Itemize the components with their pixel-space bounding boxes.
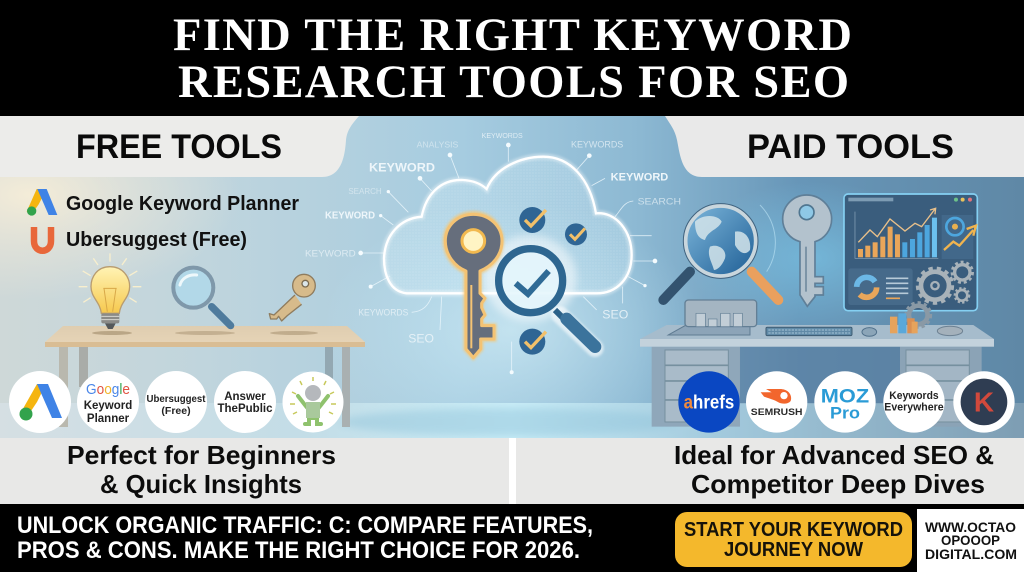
keyword labels: KEYWORDS: [571, 140, 623, 150]
logo: figure: [282, 372, 344, 432]
keyword labels: SEO: [602, 307, 628, 321]
title banner: [0, 0, 1024, 116]
keyword labels: [305, 131, 681, 345]
keyword labels: KEYWORD: [305, 249, 356, 259]
logo: google keyword planner: Planner: [87, 413, 130, 425]
icon: light bulb: [79, 253, 141, 329]
logo: google keyword planner: Keyword: [84, 400, 132, 412]
desk: paid tools: [640, 325, 994, 427]
keyword labels: SEARCH: [348, 186, 382, 196]
logo: moz pro: [814, 371, 876, 433]
logo: ahrefs: [678, 371, 740, 433]
footer text line 1: UNLOCK ORGANIC TRAFFIC: C: COMPARE FEATURES,: [17, 512, 593, 539]
keyword labels: KEYWORD: [611, 171, 668, 183]
keyword labels: KEYWORD: [369, 161, 435, 175]
desk: free tools: [45, 326, 365, 427]
keyword labels: SEO: [408, 331, 434, 345]
donut tile: [848, 268, 913, 305]
dashboard panel: [844, 194, 977, 311]
website line 3: DIGITAL.COM: [925, 546, 1017, 562]
logo: google keyword planner: Google: [86, 381, 130, 398]
text: beginners line 1: Perfect for Beginners: [67, 440, 336, 470]
paid tools illustration: [640, 182, 1015, 433]
icon: gold key: [269, 274, 315, 321]
illustration background: [0, 116, 1024, 438]
heading: free tools: FREE TOOLS: [76, 128, 282, 166]
icon: magnifying glass: [173, 268, 231, 326]
keyword labels: ANALYSIS: [417, 139, 459, 149]
icon: large magnifier: [499, 249, 595, 348]
logo: google keyword planner: [77, 371, 139, 433]
logo: google ads: [9, 371, 71, 433]
text: google keyword planner: Google Keyword Planner: [66, 193, 299, 215]
website line 1: WWW.OCTAO: [925, 519, 1016, 535]
text: beginners line 2: & Quick Insights: [100, 469, 302, 499]
logo: ubersuggest free: Ubersuggest: [146, 393, 206, 405]
logo: keywords everywhere: Keywords: [889, 390, 939, 402]
panel: free tools header: [0, 116, 359, 177]
text: advanced line 1: Ideal for Advanced SEO &: [674, 440, 994, 470]
central cloud illustration: [305, 131, 681, 374]
free tool logos row: [9, 371, 344, 433]
website line 2: OPOOOP: [941, 532, 1000, 548]
icon: google ads: [27, 189, 57, 216]
logo: ubersuggest free: (Free): [161, 405, 191, 417]
logo: moz pro: Pro: [830, 403, 860, 422]
panel: paid tools header: [665, 116, 1024, 177]
keyword labels: SEARCH: [638, 196, 681, 206]
logo: moz pro: MOZ: [821, 386, 869, 407]
footer text line 2: PROS & CONS. MAKE THE RIGHT CHOICE FOR 2026.: [17, 537, 580, 564]
icon: gears: [918, 262, 973, 303]
trend tile: [942, 215, 976, 259]
icon: check badges: [519, 207, 587, 355]
logo: k: K: [974, 387, 994, 418]
cta line 1: START YOUR KEYWORD: [684, 518, 903, 541]
panel: advanced caption: [516, 438, 1024, 504]
logo: answer the public: [214, 371, 276, 433]
glow behind magnifier: [483, 235, 577, 322]
title line 1: FIND THE RIGHT KEYWORD: [173, 10, 852, 61]
free tool list: [27, 189, 299, 251]
title line 2: RESEARCH TOOLS FOR SEO: [178, 57, 849, 108]
bar chart: [855, 208, 938, 258]
icon: large key: [443, 211, 504, 361]
icon: globe magnifier: [663, 204, 778, 300]
logo: ubersuggest free: [145, 371, 207, 433]
keyword labels: KEYWORD: [325, 211, 375, 222]
keyword labels: KEYWORDS: [482, 131, 523, 140]
heading: paid tools: PAID TOOLS: [747, 128, 954, 166]
paid tool logos row: [678, 371, 1015, 433]
website box: [917, 509, 1024, 572]
text: advanced line 2: Competitor Deep Dives: [691, 469, 985, 499]
cta line 2: JOURNEY NOW: [724, 538, 864, 561]
keyword labels: KEYWORDS: [358, 307, 408, 317]
keyword network lines: [358, 143, 657, 374]
icon: silver key: [783, 195, 832, 306]
logo: semrush: SEMRUSH: [751, 407, 802, 417]
logo: semrush: [746, 371, 807, 433]
text: ubersuggest: Ubersuggest (Free): [66, 229, 247, 251]
desk objects: [668, 300, 963, 336]
footer bar: [0, 504, 1024, 572]
logo: answer the public: ThePublic: [218, 403, 273, 415]
cta button: [675, 512, 912, 567]
logo: k: [953, 371, 1015, 433]
logo: keywords everywhere: [883, 371, 945, 433]
icon: ubersuggest: [34, 227, 51, 251]
panel: beginners caption: [0, 438, 509, 504]
logo: ahrefs: ahrefs: [684, 393, 734, 414]
logo: answer the public: Answer: [224, 391, 266, 403]
logo: keywords everywhere: Everywhere: [884, 402, 944, 414]
cloud: [384, 157, 632, 293]
